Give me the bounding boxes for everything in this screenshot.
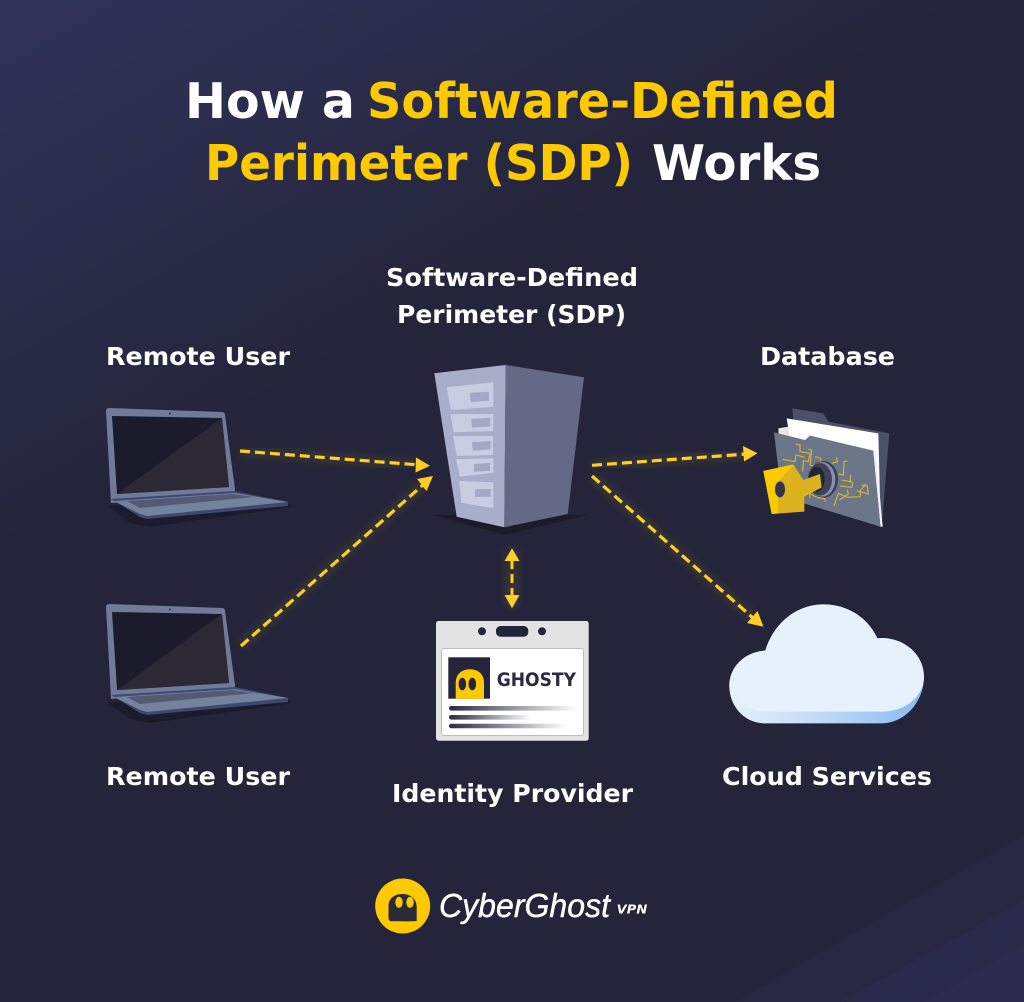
title: How a (185, 73, 355, 130)
icon: cloud (729, 604, 924, 723)
label: identity provider: Identity Provider (392, 779, 634, 808)
logo: CyberGhost VPN: VPN (617, 902, 647, 916)
arrow: bottom laptop to server (241, 476, 433, 646)
logo: CyberGhost VPN: CyberGhost (439, 887, 612, 924)
logo: CyberGhost VPN (375, 878, 647, 934)
icon: laptop bottom (106, 604, 292, 723)
label: software-defined perimeter: Software-Defined (386, 263, 638, 292)
label: software-defined perimeter (386, 263, 638, 329)
circuit lines (783, 444, 868, 506)
label: database: Database (760, 342, 895, 371)
icon: identity badge (436, 621, 589, 741)
arrow: server to database (592, 446, 758, 465)
badge name: GHOSTY (497, 669, 576, 691)
label: remote user top: Remote User (106, 342, 291, 371)
title: Software-Defined (367, 73, 838, 130)
label: software-defined perimeter: Perimeter (SDP) (397, 300, 626, 329)
title (185, 73, 838, 192)
label: remote user bottom: Remote User (106, 762, 291, 791)
label: cloud services: Cloud Services (722, 762, 932, 791)
icon: laptop top (106, 408, 292, 527)
title: Works (652, 135, 821, 192)
title: Perimeter (SDP) (205, 135, 633, 192)
ghost portrait (448, 657, 490, 699)
icon: encrypted folder with key (763, 408, 889, 527)
arrow: server to identity provider, two-way (504, 546, 520, 610)
arrow: top laptop to server (240, 451, 430, 472)
icon: server cabinet (433, 365, 588, 535)
arrow: server to cloud (592, 476, 764, 627)
